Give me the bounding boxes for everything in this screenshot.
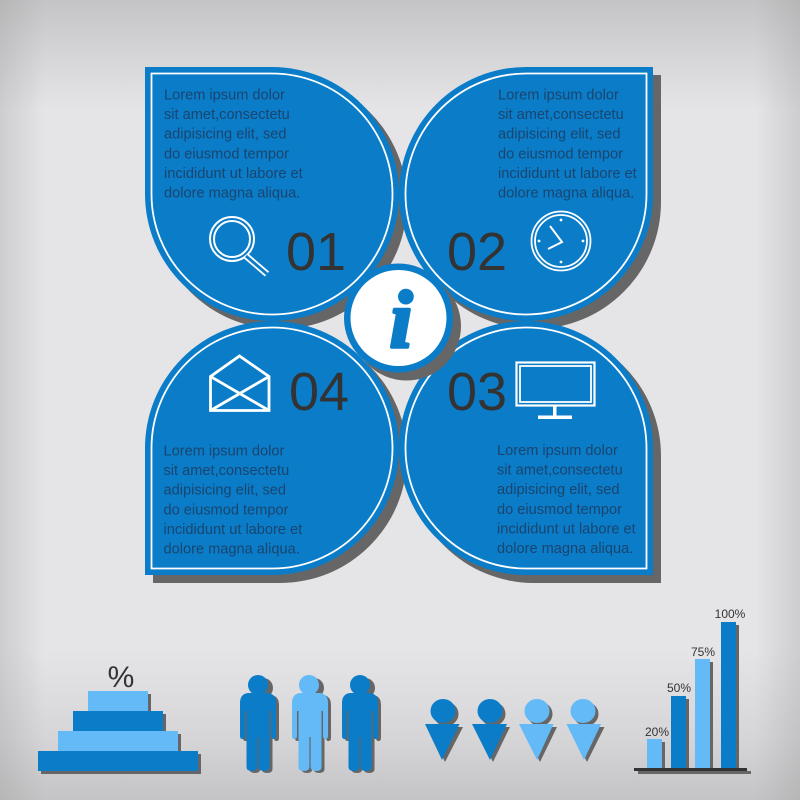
percent sign: % <box>108 661 134 694</box>
panel 4: mail <box>145 321 407 583</box>
icon: envelope <box>210 356 269 410</box>
icon: clock <box>532 212 590 270</box>
panel 2 text: do eiusmod tempor <box>498 146 623 162</box>
panel 1 text: do eiusmod tempor <box>164 146 289 162</box>
pin 4 <box>566 699 604 762</box>
icon: magnifying glass <box>210 217 267 274</box>
bar 100% <box>715 607 746 768</box>
panel 3 text: adipisicing elit, sed <box>497 482 620 498</box>
number 04: 04 <box>289 362 349 422</box>
center info badge <box>344 264 461 380</box>
icon: monitor <box>516 362 594 419</box>
panel 4 text: sit amet,consectetu <box>164 463 289 479</box>
panel 4 text: dolore magna aliqua. <box>164 542 300 558</box>
pin 3 <box>519 699 557 762</box>
percent pyramid <box>38 661 201 774</box>
panel 4 text: Lorem ipsum dolor <box>164 444 284 460</box>
panel 4 text: adipisicing elit, sed <box>164 483 286 499</box>
bar 20% <box>645 725 669 768</box>
panel 2 text: sit amet,consectetu <box>498 107 624 123</box>
panel 3 text: sit amet,consectetu <box>497 463 623 479</box>
pin icons <box>425 699 604 762</box>
panel 1 text: incididunt ut labore et <box>164 166 303 182</box>
person 1 <box>240 675 279 773</box>
people icons <box>240 675 381 773</box>
panel 3: monitor <box>399 321 661 583</box>
person 2 <box>292 675 331 773</box>
bar 20%: 20% <box>645 725 669 739</box>
bar 50% <box>667 681 691 768</box>
panel 1 text: Lorem ipsum dolor <box>164 88 285 104</box>
panel 2: clock <box>399 67 661 329</box>
bar chart <box>634 607 751 774</box>
panel 2 text: incididunt ut labore et <box>498 166 637 182</box>
panel 2 text: dolore magna aliqua. <box>498 186 634 202</box>
number 01: 01 <box>286 222 346 282</box>
panel 3 text: dolore magna aliqua. <box>497 541 633 557</box>
number 02: 02 <box>447 222 507 282</box>
pin 2 <box>472 699 510 762</box>
panel 1 text: adipisicing elit, sed <box>164 127 286 143</box>
bar 100%: 100% <box>715 607 746 621</box>
panel 1: search <box>145 67 407 329</box>
number 03: 03 <box>447 362 507 422</box>
panel 1 text: dolore magna aliqua. <box>164 186 300 202</box>
panel 4 text: incididunt ut labore et <box>164 522 302 538</box>
panel 3 text: incididunt ut labore et <box>497 521 636 537</box>
panel 2 text: Lorem ipsum dolor <box>498 88 619 104</box>
axis <box>634 768 751 774</box>
icon: letter i: i <box>390 274 413 365</box>
bar 75% <box>691 645 715 768</box>
panel 2 text: adipisicing elit, sed <box>498 127 620 143</box>
panel 4 text: do eiusmod tempor <box>164 502 289 518</box>
bar 50%: 50% <box>667 681 691 695</box>
pin 1 <box>425 699 463 762</box>
pyramid shadow <box>41 694 201 774</box>
person 3 <box>342 675 381 773</box>
panel 3 text: do eiusmod tempor <box>497 502 622 518</box>
bar 75%: 75% <box>691 645 715 659</box>
panel 1 text: sit amet,consectetu <box>164 107 290 123</box>
panel 3 text: Lorem ipsum dolor <box>497 443 618 459</box>
